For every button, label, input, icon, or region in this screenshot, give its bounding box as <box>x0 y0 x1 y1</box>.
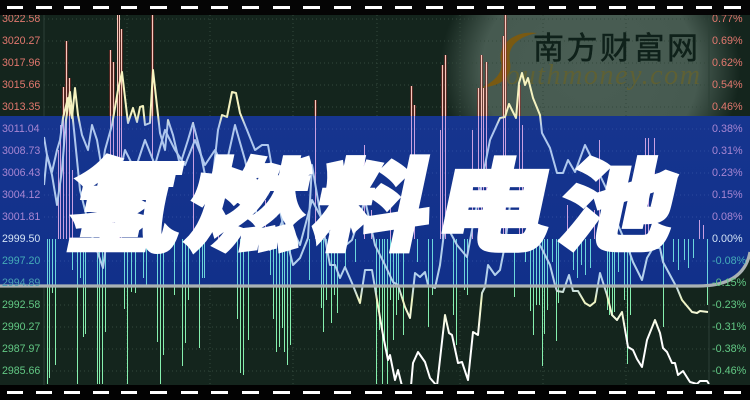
right axis labels: -0.31% <box>712 321 747 333</box>
bar chart: rising bars <box>58 15 704 239</box>
rising bars <box>58 15 704 239</box>
left axis labels: 3013.35 <box>2 101 40 113</box>
left axis labels: 2994.89 <box>2 277 40 289</box>
right axis labels: -0.38% <box>712 343 747 355</box>
left axis labels: 3001.81 <box>2 211 40 223</box>
banner grid <box>44 129 710 261</box>
right axis labels: -0.46% <box>712 365 747 377</box>
right axis labels: 0.08% <box>712 211 743 223</box>
watermark glow <box>430 15 750 215</box>
right axis labels: 0.54% <box>712 79 743 91</box>
top strip band <box>0 0 750 15</box>
banner: blue band <box>0 116 750 286</box>
title: 氢燃料电池 <box>56 153 687 264</box>
bottom strip band <box>0 385 750 400</box>
bottom strip dashes <box>7 391 741 394</box>
left axis labels: 3006.43 <box>2 167 40 179</box>
left axis labels: 3022.58 <box>2 13 40 25</box>
right axis labels: 0.15% <box>712 189 743 201</box>
left axis labels: 3020.27 <box>2 35 40 47</box>
right axis labels: -0.23% <box>712 299 747 311</box>
top film strip <box>0 0 750 15</box>
right axis labels: -0.08% <box>712 255 747 267</box>
left axis labels: 3017.96 <box>2 57 40 69</box>
right axis labels: 0.62% <box>712 57 743 69</box>
bottom film strip <box>0 385 750 400</box>
watermark: southmoney logo <box>481 31 700 91</box>
right axis labels: 0.23% <box>712 167 743 179</box>
left axis labels: 2997.20 <box>2 255 40 267</box>
left axis labels: 2987.97 <box>2 343 40 355</box>
right axis labels: 0.46% <box>712 101 743 113</box>
left axis labels: 3004.12 <box>2 189 40 201</box>
right axis labels: 0.31% <box>712 145 743 157</box>
left axis labels: 2992.58 <box>2 299 40 311</box>
right axis labels <box>712 13 747 377</box>
rising bars glow <box>64 15 520 116</box>
left axis labels <box>2 13 40 377</box>
bar chart: falling bars <box>48 239 708 385</box>
right axis labels: 0.00% <box>712 233 743 245</box>
left axis labels: 3011.04 <box>2 123 40 135</box>
left axis labels: 3008.73 <box>2 145 40 157</box>
line chart: index lines <box>44 70 709 386</box>
right axis labels: 0.77% <box>712 13 743 25</box>
banner outline <box>0 252 750 286</box>
logo: Chinese name: 南方财富网 <box>533 31 698 66</box>
left axis labels: 3015.66 <box>2 79 40 91</box>
left axis labels: 2999.50 <box>2 233 40 245</box>
left axis labels: 2985.66 <box>2 365 40 377</box>
line: second index <box>44 73 708 318</box>
left axis labels: 2990.27 <box>2 321 40 333</box>
right axis labels: -0.15% <box>712 277 747 289</box>
logo: domain: outhmoney.com <box>506 60 700 91</box>
logo: S swoosh <box>481 33 537 88</box>
top strip dashes <box>7 6 741 9</box>
right axis labels: 0.69% <box>712 35 743 47</box>
line: main index <box>44 70 709 386</box>
right axis labels: 0.38% <box>712 123 743 135</box>
